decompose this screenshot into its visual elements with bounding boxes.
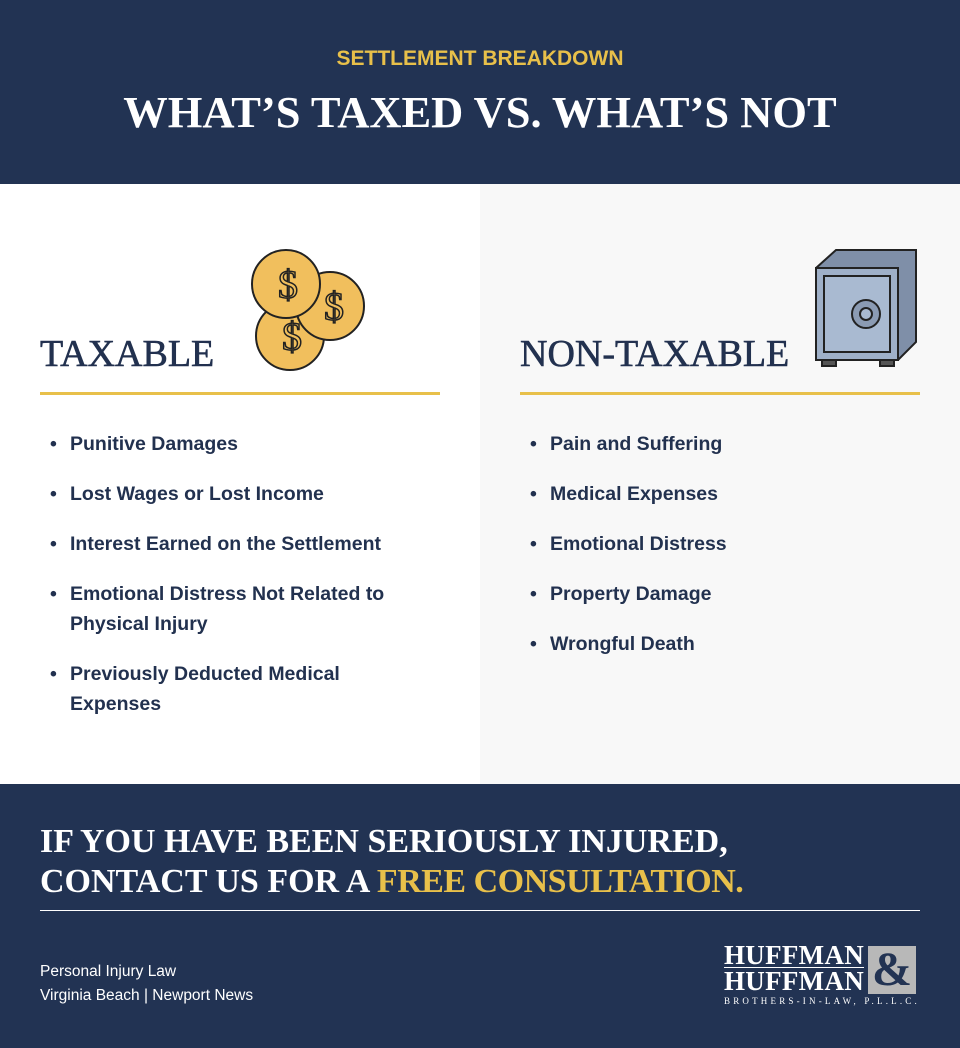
logo: BROTHERS-IN-LAW, P.L.L.C. — [724, 996, 920, 1006]
contact text: Virginia Beach | Newport News — [40, 987, 253, 1004]
call to action: CONTACT US FOR A FREE CONSULTATION. — [40, 863, 743, 900]
list: taxable items: Lost Wages or Lost Income — [70, 483, 324, 505]
logo: & — [872, 943, 912, 996]
list: non-taxable items — [530, 433, 727, 655]
list: non-taxable items: Wrongful Death — [550, 633, 695, 655]
icon: coins: $ — [278, 262, 298, 307]
list: non-taxable items: Pain and Suffering — [550, 433, 722, 455]
list: taxable items: Previously Deducted Medical Expenses — [70, 663, 340, 715]
divider — [40, 392, 440, 395]
list: taxable items: Punitive Damages — [70, 433, 238, 455]
icon: coins — [251, 249, 365, 371]
logo: HUFFMAN — [724, 966, 864, 996]
heading: taxable: TAXABLE — [40, 333, 214, 375]
heading: non-taxable: NON-TAXABLE — [520, 333, 789, 375]
title: WHAT’S TAXED VS. WHAT’S NOT — [123, 87, 837, 137]
contact text — [40, 963, 253, 1004]
panel: non-taxable — [520, 249, 920, 655]
list: taxable items: Interest Earned on the Settlement — [70, 533, 381, 555]
icon: safe — [815, 249, 917, 367]
contact text: Personal Injury Law — [40, 963, 176, 980]
logo — [724, 940, 920, 1006]
panel: taxable — [40, 249, 440, 715]
call to action: IF YOU HAVE BEEN SERIOUSLY INJURED, — [40, 823, 728, 860]
header — [0, 0, 960, 184]
list: non-taxable items: Emotional Distress — [550, 533, 727, 555]
footer — [0, 784, 960, 1048]
list: non-taxable items: Medical Expenses — [550, 483, 718, 505]
logo: HUFFMAN — [724, 940, 864, 970]
list: non-taxable items: Property Damage — [550, 583, 711, 605]
list: taxable items — [50, 433, 384, 715]
divider — [520, 392, 920, 395]
list: taxable items: Emotional Distress Not Related to Physical Injury — [70, 583, 384, 635]
subtitle: SETTLEMENT BREAKDOWN — [336, 47, 624, 70]
call to action — [40, 823, 743, 900]
icon: coins: $ — [324, 284, 344, 329]
icon: coins: $ — [282, 314, 302, 359]
panel: non-taxable background — [480, 184, 960, 784]
